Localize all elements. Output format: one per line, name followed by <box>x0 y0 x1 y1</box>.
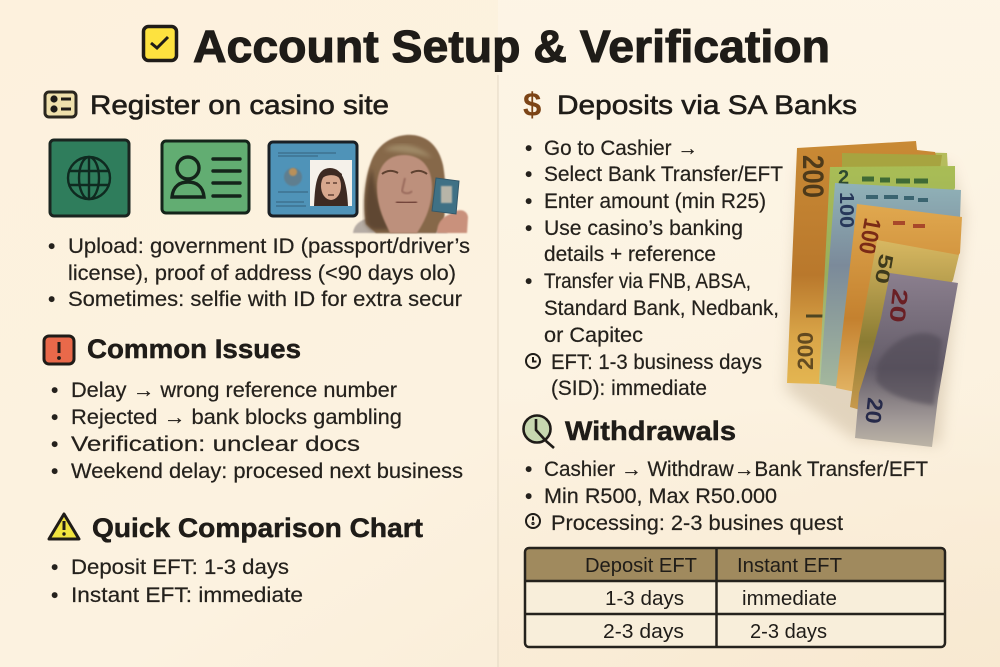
banknote 20: 20 <box>860 396 888 425</box>
panel: withdrawals <box>524 416 945 647</box>
bullet list: register: license), proof of address (<90 days olo) <box>68 262 456 285</box>
icon: alert square <box>44 336 74 364</box>
bullet list: issues: • <box>51 433 58 456</box>
bullet list: comparison <box>51 556 303 607</box>
bullet list: comparison: • <box>51 556 58 579</box>
comparison table: 2-3 days <box>750 621 827 643</box>
bullet list: withdrawals: • <box>525 485 532 508</box>
icon: ID card <box>162 141 249 213</box>
comparison table: 1-3 days <box>605 588 684 610</box>
banknote green <box>819 166 955 383</box>
bullet list: register: Upload: government ID (passport/driver’s <box>68 235 470 258</box>
banknote 50 <box>850 240 959 410</box>
heading: register: Register on casino site <box>90 90 389 120</box>
comparison table: immediate <box>742 588 837 610</box>
bullet list: comparison: Instant EFT: immediate <box>71 584 303 607</box>
banknote orange 100: 100 <box>853 216 886 256</box>
banknote 20: 20 <box>884 287 913 324</box>
comparison table: Instant EFT <box>737 555 842 577</box>
bullet list: deposits: EFT: 1-3 business days <box>551 351 762 374</box>
panel: register on casino site <box>45 90 470 311</box>
banknote 200: 200 <box>796 155 829 198</box>
bullet list: withdrawals: Cashier → Withdraw→Bank Transfer/EFT <box>544 458 928 481</box>
comparison table <box>525 548 945 647</box>
bullet list: deposits: • <box>525 270 532 293</box>
bullet list: register: • <box>48 288 55 311</box>
banknote blue 100: 100 <box>835 192 857 228</box>
heading: deposits: Deposits via SA Banks <box>557 90 857 120</box>
title <box>144 21 830 72</box>
banknote 50: 50 <box>870 252 897 285</box>
icon: small clock <box>526 354 540 368</box>
banknote green: 2 <box>838 167 849 189</box>
bullet list: register: • <box>48 235 55 258</box>
bullet list: comparison: • <box>51 584 58 607</box>
panel: deposits via SA banks <box>523 86 965 447</box>
bullet list: issues: Verification: unclear docs <box>71 433 360 456</box>
bullet list: withdrawals <box>525 458 928 535</box>
bullet list: deposits: (SID): immediate <box>551 377 707 400</box>
photo: woman holding ID <box>353 135 468 233</box>
bullet list: issues: Rejected → bank blocks gambling <box>71 406 402 429</box>
heading: quick comparison: Quick Comparison Chart <box>92 513 423 543</box>
photo: fan of rand banknotes <box>785 141 965 447</box>
bullet list: deposits: Transfer via FNB, ABSA, <box>544 270 751 293</box>
icon: yellow checkbox <box>144 26 176 60</box>
bullet list: deposits: Go to Cashier → <box>544 137 698 160</box>
bullet list: deposits: • <box>525 163 532 186</box>
banknote 200 <box>787 141 948 385</box>
bullet list: deposits: • <box>525 137 532 160</box>
bullet list: comparison: Deposit EFT: 1-3 days <box>71 556 289 579</box>
bullet list: deposits: Standard Bank, Nedbank, <box>544 297 779 320</box>
icon: small alert clock <box>526 514 540 528</box>
panel: quick comparison chart <box>49 513 423 607</box>
heading: common issues: Common Issues <box>87 334 301 364</box>
icon: register form <box>45 92 76 117</box>
bullet list: withdrawals: • <box>525 458 532 481</box>
banknote 20 <box>855 273 958 447</box>
bullet list: deposits: or Capitec <box>544 324 643 347</box>
bullet list: issues: • <box>51 460 58 483</box>
bullet list: deposits: • <box>525 190 532 213</box>
bullet list: register <box>48 235 470 311</box>
banknote orange 100 <box>836 204 962 395</box>
bullet list: deposits: Use casino’s banking <box>544 217 743 240</box>
bullet list: issues: • <box>51 406 58 429</box>
icon: passport photo card <box>269 142 357 216</box>
bullet list: issues: Delay → wrong reference number <box>71 379 397 402</box>
comparison table: Deposit EFT <box>585 555 697 577</box>
title text: Account Setup & Verification <box>193 21 830 72</box>
bullet list: issues <box>51 379 463 483</box>
panel: common issues <box>44 334 463 483</box>
heading: withdrawals: Withdrawals <box>565 416 736 446</box>
bullet list: register: Sometimes: selfie with ID for extra secur <box>68 288 462 311</box>
icon: warning triangle <box>49 514 79 539</box>
bullet list: issues: Weekend delay: procesed next business <box>71 460 463 483</box>
bullet list: withdrawals: Min R500, Max R50.000 <box>544 485 777 508</box>
bullet list: deposits <box>525 137 783 400</box>
bullet list: deposits: • <box>525 217 532 240</box>
banknote 200: 200 <box>793 332 818 370</box>
bullet list: deposits: Select Bank Transfer/EFT <box>544 163 783 186</box>
bullet list: deposits: Enter amount (min R25) <box>544 190 766 213</box>
icon: dollar sign: $ <box>523 86 541 123</box>
icon: clock magnifier <box>524 416 554 448</box>
bullet list: issues: • <box>51 379 58 402</box>
bullet list: deposits: details + reference <box>544 243 716 266</box>
bullet list: withdrawals: Processing: 2-3 busines quest <box>551 512 843 535</box>
icon: globe card <box>50 140 129 216</box>
banknote blue 100 <box>820 183 961 390</box>
comparison table: 2-3 days <box>603 621 684 643</box>
